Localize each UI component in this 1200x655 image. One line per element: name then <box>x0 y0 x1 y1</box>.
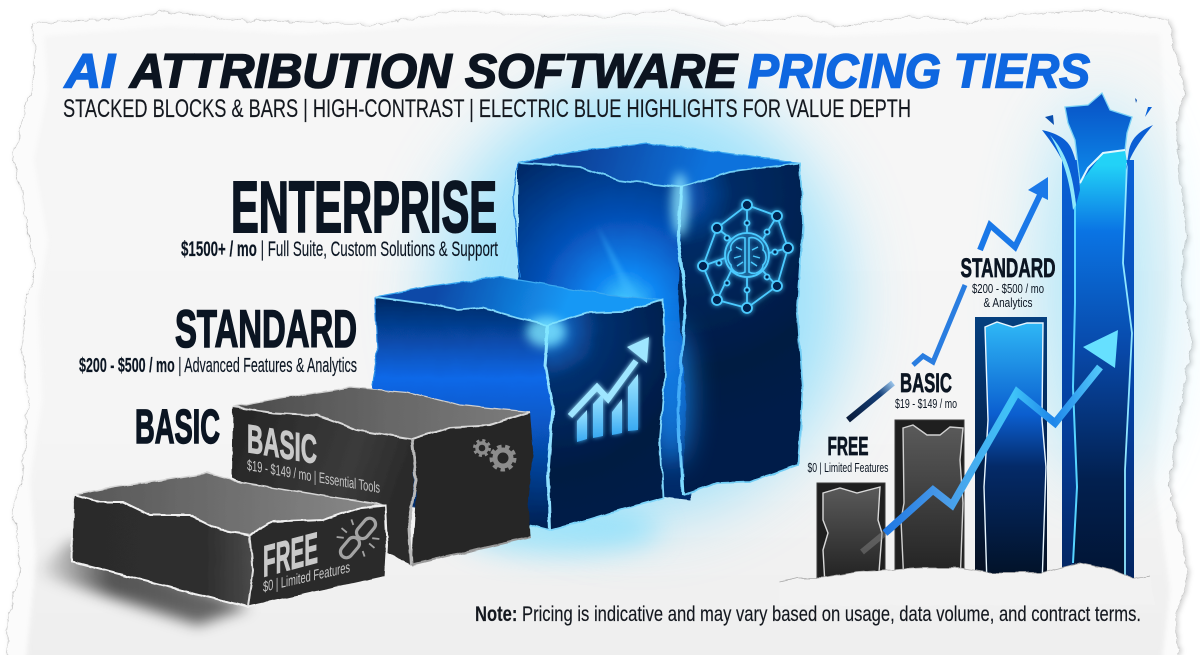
lower trend arrow <box>862 330 1118 552</box>
label: basic: BASIC <box>900 368 952 398</box>
title: ATTRIBUTION SOFTWARE <box>129 46 739 98</box>
standard label: STANDARD <box>175 300 357 359</box>
enterprise label: $1500+ / mo | Full Suite, Custom Solutions & Support <box>181 238 498 261</box>
free block face text <box>263 523 350 596</box>
label: free <box>808 431 889 475</box>
basic block face text: $19 - $149 / mo | Essential Tools <box>247 457 380 497</box>
basic label: BASIC <box>135 401 220 454</box>
standard block <box>372 277 665 530</box>
title: PRICING TIERS <box>748 46 1090 98</box>
free block face text: FREE <box>263 523 318 587</box>
label: standard <box>960 253 1056 310</box>
bar: standard <box>975 317 1047 585</box>
label: standard: & Analytics <box>984 295 1033 310</box>
label: standard: STANDARD <box>960 253 1056 283</box>
enterprise label: ENTERPRISE <box>231 168 497 248</box>
subtitle: STACKED BLOCKS & BARS | HIGH-CONTRAST | ELECTRIC BLUE HIGHLIGHTS FOR VALUE DEPTH <box>63 95 911 123</box>
icon: brain network <box>698 200 793 313</box>
blue glow behind blocks <box>435 85 1156 555</box>
basic block <box>232 387 533 565</box>
standard label: $200 - $500 / mo | Advanced Features & Analytics <box>79 355 357 377</box>
label: free: $0 | Limited Features <box>808 460 889 475</box>
basic block face text: BASIC <box>247 416 317 473</box>
free block shadow <box>32 540 250 625</box>
bar: enterprise <box>1042 93 1153 585</box>
right bar labels <box>808 253 1056 475</box>
bar chart <box>817 93 1153 585</box>
standard label <box>79 300 357 377</box>
label: free: FREE <box>828 431 868 461</box>
enterprise label <box>181 168 498 261</box>
icon: gears <box>474 440 514 470</box>
starburst top <box>1065 93 1132 183</box>
enterprise block <box>513 143 803 500</box>
title: AI <box>64 46 117 98</box>
icon: broken link <box>328 507 388 569</box>
torn paper strip over bars <box>780 563 1155 605</box>
label: basic <box>895 368 957 411</box>
title <box>64 46 1090 98</box>
upper trend arrow <box>848 177 1048 420</box>
bar: free <box>817 483 885 585</box>
label: basic: $19 - $149 / mo <box>895 396 957 411</box>
free block <box>72 473 388 607</box>
icon: rising chart <box>570 337 649 442</box>
bar: basic <box>895 420 964 585</box>
label: standard: $200 - $500 / mo <box>972 281 1044 296</box>
free block face text: $0 | Limited Features <box>263 559 350 596</box>
